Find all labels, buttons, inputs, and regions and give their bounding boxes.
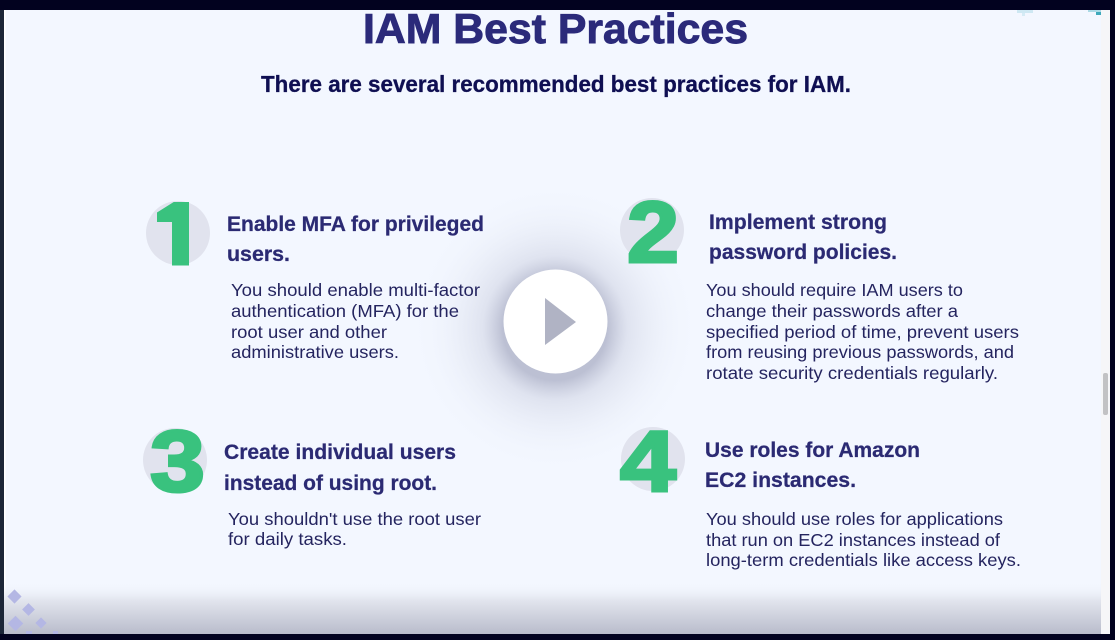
icon: number 1 xyxy=(146,201,210,266)
heading 3: Create individual users xyxy=(224,440,456,464)
icon: play button xyxy=(504,270,608,374)
play button halo xyxy=(410,183,700,473)
practice 4 xyxy=(620,414,1021,570)
body 1: root user and other xyxy=(231,322,387,342)
heading 3 xyxy=(224,440,456,495)
practice 2 xyxy=(620,185,1019,383)
body 2: from reusing previous passwords, and xyxy=(706,342,1014,362)
top-right decoration xyxy=(1017,10,1101,16)
body 2: specified period of time, prevent users xyxy=(706,322,1019,342)
body 4: long-term credentials like access keys. xyxy=(706,550,1021,570)
title: IAM Best Practices xyxy=(363,5,748,52)
heading 4: Use roles for Amazon xyxy=(705,438,920,462)
icon: number 3: 3 xyxy=(150,414,205,510)
heading 4: EC2 instances. xyxy=(705,468,856,492)
practice 1 xyxy=(146,189,484,362)
subtitle: There are several recommended best practices for IAM. xyxy=(261,71,851,97)
heading 1: Enable MFA for privileged xyxy=(227,212,484,236)
heading 4 xyxy=(705,438,920,492)
body 2: rotate security credentials regularly. xyxy=(706,363,998,383)
body 1: authentication (MFA) for the xyxy=(231,301,459,321)
body 4: You should use roles for applications xyxy=(706,509,1003,529)
heading 1 xyxy=(227,212,484,266)
body 4: that run on EC2 instances instead of xyxy=(706,530,1000,550)
heading 1: users. xyxy=(227,242,290,266)
bottom fade xyxy=(4,582,1101,634)
heading 2 xyxy=(709,210,897,264)
heading 2: password policies. xyxy=(709,240,897,264)
body 4 xyxy=(706,509,1021,570)
body 3: You shouldn't use the root user xyxy=(228,509,481,529)
icon: number 4: 4 xyxy=(620,414,676,510)
body 1: administrative users. xyxy=(231,342,399,362)
heading 2: Implement strong xyxy=(709,210,887,234)
body 3: for daily tasks. xyxy=(228,529,347,549)
heading 3: instead of using root. xyxy=(224,471,437,495)
body 1: You should enable multi-factor xyxy=(231,280,480,300)
bottom-left diamonds xyxy=(7,589,58,634)
icon: number 1: 1 xyxy=(156,189,202,278)
body 1 xyxy=(231,280,480,362)
body 2: You should require IAM users to xyxy=(706,280,963,300)
body 2 xyxy=(706,280,1019,383)
body 2: change their passwords after a xyxy=(706,301,958,321)
icon: number 2: 2 xyxy=(627,185,679,281)
practice 3 xyxy=(143,414,481,549)
body 3 xyxy=(228,509,481,549)
scrollbar xyxy=(1101,10,1110,634)
